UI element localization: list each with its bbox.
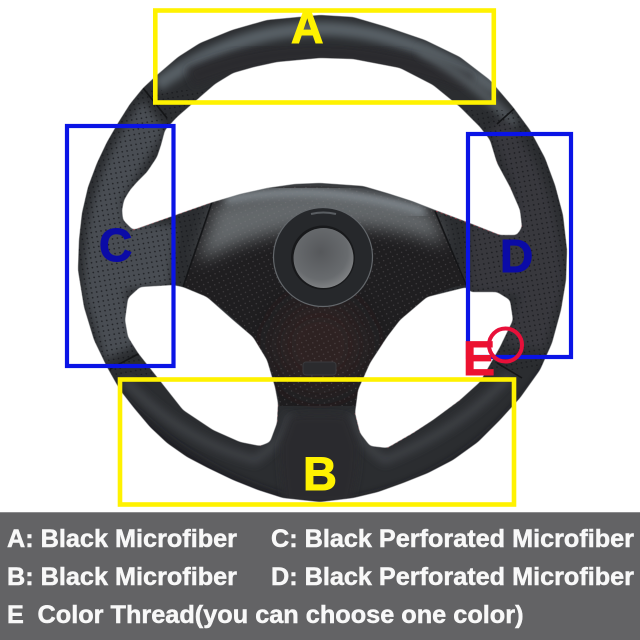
steering wheel [78,14,568,502]
rim section: right, perforated [435,110,570,370]
label C: C [99,219,132,271]
box B [120,380,514,504]
legend: E letter: E [7,601,24,629]
label B: B [303,447,337,500]
hub badge [303,362,336,375]
box D [468,134,571,357]
label D: D [500,230,533,282]
rim section: bottom, microfiber [124,368,540,497]
legend: C: C: Black Perforated Microfiber [271,525,634,553]
box C [67,126,174,366]
label E: E [463,333,495,386]
hub centre knob [274,208,372,306]
decorative seams [110,88,522,378]
label A: A [291,2,324,53]
rim section: left, perforated [70,90,210,375]
rim section: top, microfiber [157,29,515,125]
box A [155,10,494,102]
hub: perforated centre panel [183,186,465,406]
legend: E description: Color Thread(you can choose one color) [38,601,524,629]
hub: lower smooth panel [280,418,352,502]
legend: D: D: Black Perforated Microfiber [271,563,634,591]
thread marker circle [489,328,522,362]
legend: A: A: Black Microfiber [7,525,237,553]
legend: B: B: Black Microfiber [7,563,237,591]
legend panel [0,512,640,640]
